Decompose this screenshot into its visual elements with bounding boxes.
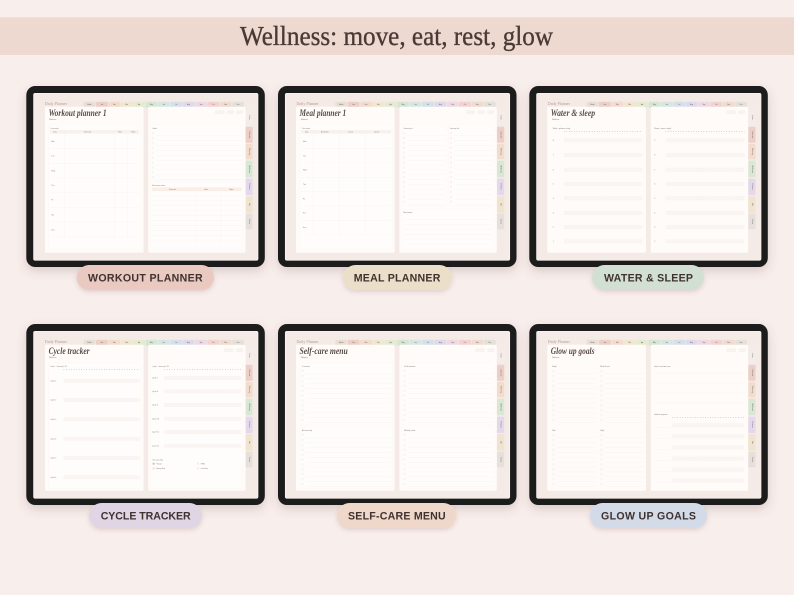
water tracker: 1 [553,241,554,243]
weekly workout table: Mon [51,141,55,143]
side tabs: Life [248,441,250,444]
heading: Workout planner 1 [49,108,107,119]
month tabs: Month [590,103,595,106]
goals: skin: Skin [552,430,556,432]
legend: Heavy flow [156,468,166,470]
goals: style: Style [600,429,604,432]
panel: self-care menu tablet [278,324,516,505]
legend: Use your key [152,459,163,461]
month tabs: Jan [352,104,355,106]
month tabs: Jun [163,342,165,344]
month tabs: Oct [212,103,215,106]
label: cycle tracker: CYCLE TRACKER [101,510,191,522]
left page [296,107,395,253]
side tabs: Index [751,115,753,120]
month tabs: Jul [175,342,178,344]
month tabs: Sep [200,104,203,106]
month tabs [335,102,496,108]
grocery list two: Grocery list [450,127,460,130]
panel: workout planner tablet: Wellness [49,119,56,121]
month tabs: Jan [101,104,103,106]
month tabs: Month [339,103,344,106]
weekly meal table: Fri [303,198,306,200]
side tabs [748,110,756,229]
meal notes: Meal notes [404,211,412,214]
side tabs: Planning [500,386,502,393]
side tabs: Wellness [248,165,250,173]
month tabs: Nov [224,104,227,106]
month tabs: Sep [703,342,706,344]
month tabs: Feb [365,342,367,344]
month tabs: Jan [352,342,355,344]
side tabs: Calendar [500,369,502,377]
left page [45,345,144,491]
sleep tracker: 2 [654,241,655,243]
goals checklist [151,125,242,180]
month tabs: Nov [727,342,730,344]
side tabs: Notes [500,219,502,224]
month tabs: Jul [427,342,430,344]
month tabs: Jun [666,342,668,344]
weekly meal table: Tue [303,155,306,157]
month tabs: Jan [604,342,606,344]
weekly workout table: Fri [51,200,54,202]
month tabs: Apr [390,341,393,344]
weekly meal table: Breakfast [321,130,329,134]
heading: Self-care menu [300,346,348,357]
side tabs: Index [500,353,502,358]
water tracker: 7 [553,155,554,157]
weekly meal table: Wed [303,170,307,172]
month tabs: Nov [727,104,730,106]
cycle chart right: Cycle 10 [152,418,159,420]
goals: mind and soul [600,366,644,423]
side tabs [748,348,756,467]
panel: glow up goals tablet: Daily Planner [548,339,571,344]
month tabs: Dec [740,104,743,106]
side tabs: Wellness [751,403,753,411]
sleep tracker: Sleep · hours a night [654,127,671,130]
month tabs: Dec [237,104,240,106]
water tracker: 6 [553,169,554,171]
panel: glow up goals tablet [529,324,768,505]
side tabs: Life [248,203,250,206]
label: cycle tracker [89,503,202,528]
legend: PMS [201,464,205,466]
label: self-care menu: SELF-CARE MENU [348,510,446,522]
month tabs [84,340,244,346]
side tabs: Finance [500,184,502,190]
side tabs: Index [751,353,753,358]
heading: Cycle tracker [49,346,90,357]
sleep tracker: 9 [654,140,655,142]
panel: water and sleep tablet [529,86,768,267]
side tabs [245,348,253,467]
weekly workout table: Sat [51,213,54,216]
panel: water and sleep tablet: Daily Planner [548,101,571,106]
panel: workout planner tablet: Daily Planner [45,101,68,106]
side tabs: Index [248,115,250,120]
month tabs: Feb [616,104,619,106]
exercise notes table [151,183,242,250]
checklist: at home [300,427,393,488]
side tabs: Wellness [751,165,753,173]
panel: workout planner tablet [26,86,265,267]
month tabs: Month [339,341,344,344]
month tabs: Apr [138,103,141,106]
checklist: 5 minutes: 5 minutes [302,365,310,368]
month tabs: Dec [740,342,743,344]
title banner [0,17,794,55]
right page [148,345,246,491]
month tabs: Feb [113,342,116,344]
month tabs: May [402,104,405,106]
weekly meal table: Dinner [374,132,380,134]
side tabs: Calendar [751,369,753,377]
month tabs: Dec [488,342,491,344]
side tabs: Notes [248,219,251,224]
month tabs: Jan [604,104,606,106]
right page [148,107,246,253]
panel: meal planner tablet: Daily Planner [296,101,319,106]
cycle chart right: Cycle 12 [152,445,159,447]
label: water and sleep: WATER & SLEEP [604,272,693,284]
water tracker: 3 [553,213,554,215]
exercise notes table: Exercise [169,189,176,191]
label: meal planner [343,265,452,290]
side tabs: Wellness [500,165,502,173]
month tabs: May [150,342,153,344]
water tracker [553,127,642,243]
month tabs: Apr [390,103,393,106]
weekly meal table: Day [305,132,308,134]
grocery list two [449,125,494,206]
cycle chart left: Cycle 2 [50,400,56,402]
month tabs: Jun [414,342,417,344]
cycle chart left: Cycle 1 [50,380,56,382]
goals: mind and soul: Mind & soul [600,366,610,368]
label: workout planner: WORKOUT PLANNER [88,272,203,284]
weekly workout table [49,125,140,250]
right page [400,107,497,253]
side tabs: Finance [751,422,753,428]
month tabs: Oct [464,103,467,106]
month tabs [587,102,747,108]
month tabs: Dec [488,104,491,106]
buttons [727,348,746,352]
side tabs: Life [500,441,502,444]
checklist: 15 to 30 minutes [402,363,494,425]
panel: meal planner tablet: Wellness [301,119,308,121]
weekly workout table: Sets [118,130,122,134]
legend [152,459,208,470]
goals: body [552,366,596,423]
side tabs: Planning [248,148,250,155]
side tabs: Calendar [248,131,250,139]
weekly workout table: Reps [131,132,136,134]
legend: Low flow [201,468,208,470]
cycle chart right [151,363,242,488]
month tabs: Mar [628,342,632,344]
month tabs: Oct [464,341,467,344]
panel: glow up goals tablet: Wellness [552,357,559,359]
panel: self-care menu tablet: Wellness [301,357,308,359]
label: glow up goals [590,503,707,528]
month tabs: Jul [678,104,681,106]
month tabs: Apr [641,103,644,106]
weekly meal table: Lunch [348,132,353,134]
sleep tracker [654,127,744,243]
cycle chart left: Cycle 4 [50,438,56,440]
sleep tracker: 6 [654,184,655,186]
weekly workout table: Wed [51,170,55,172]
cycle chart right: Cycle 8 [152,391,158,393]
month tabs: Jun [666,104,668,106]
sleep tracker: 3 [654,227,655,229]
water tracker: 5 [553,184,554,186]
weekly workout table: Day [53,132,57,134]
month tabs: Feb [113,104,116,106]
buttons [476,348,494,352]
side tabs: Notes [500,457,502,462]
cycle chart left: Cycle 3 [50,419,56,421]
exercise notes table: Exercises notes [152,184,165,187]
side tabs: Wellness [500,403,502,411]
weekly meal table: Your week [302,128,310,130]
month tabs: Month [590,341,595,344]
month tabs: Oct [212,341,215,344]
month tabs [84,102,244,108]
side tabs: Planning [500,148,502,155]
side tabs: Notes [751,219,754,224]
month tabs: Feb [616,342,619,344]
weekly workout table: Thu [51,185,54,187]
month tabs: Oct [715,103,718,106]
month tabs: Jan [101,342,103,344]
checklist: weekly rituals: Weekly rituals [404,429,415,432]
weekly meal table [300,125,392,250]
side tabs [245,110,253,229]
month tabs: Oct [715,341,718,344]
right page [651,345,748,491]
panel: meal planner tablet [278,86,516,267]
water tracker: 2 [553,227,554,229]
goals: style [600,429,644,487]
side tabs: Life [751,203,753,206]
side tabs: Calendar [248,369,250,377]
side tabs: Finance [248,422,250,428]
goals checklist: Goals [152,128,157,130]
month tabs: Mar [377,342,380,344]
side tabs: Planning [248,386,250,393]
month tabs: Aug [187,103,190,106]
buttons [224,348,243,352]
weekly workout table: Sun [51,229,55,231]
weekly workout table: Your week [50,128,59,130]
panel: self-care menu tablet: Daily Planner [296,339,319,344]
month tabs: May [653,104,656,106]
weekly meal table: Thu [303,184,306,186]
vision notes: How I see future me [654,365,670,368]
side tabs: Wellness [248,403,250,411]
side tabs: Planning [751,386,753,393]
water tracker: 4 [553,198,554,200]
month tabs: Dec [237,342,240,344]
buttons [215,110,243,114]
cycle chart left [49,363,140,488]
month tabs: Aug [439,341,442,344]
month tabs [335,340,496,346]
right page [651,107,748,253]
cycle chart left: Cycle 5 [50,458,56,460]
month tabs: Sep [451,104,454,106]
cycle chart left: Cycle 6 [50,477,56,479]
panel: cycle tracker tablet [26,324,265,505]
panel: cycle tracker tablet: Daily Planner [45,339,68,344]
left page [547,345,646,491]
side tabs: Life [751,441,753,444]
heading: Glow up goals [551,346,595,357]
side tabs: Notes [248,457,251,462]
side tabs [497,110,504,229]
checklist: 5 minutes [300,363,393,425]
sleep tracker: 7 [654,169,655,171]
heading: Meal planner 1 [299,108,346,119]
side tabs: Index [500,115,502,120]
month tabs: Apr [641,341,644,344]
sleep tracker: 5 [654,198,655,200]
side tabs: Planning [751,148,753,155]
cycle chart right: Cycle · January 1-31 [152,366,169,368]
month tabs: Jul [427,104,430,106]
grocery list one [402,125,446,206]
weekly workout table: Tue [51,156,54,158]
habit tracker [654,413,744,483]
grocery list one: Grocery list [404,127,413,130]
title: Wellness: move, eat, rest, glow [240,21,553,51]
label: workout planner [77,265,214,290]
month tabs: May [150,104,153,106]
month tabs: Mar [377,104,380,106]
label: glow up goals: GLOW UP GOALS [601,510,696,522]
side tabs: Finance [500,422,502,428]
label: self-care menu [337,503,456,528]
buttons [727,110,745,114]
month tabs: Aug [690,341,693,344]
month tabs: May [402,342,405,344]
left page [45,107,144,253]
month tabs: Sep [451,342,454,344]
month tabs: Nov [224,342,227,344]
water tracker: 8 [553,140,554,142]
side tabs: Index [248,353,250,358]
panel: water and sleep tablet: Wellness [552,119,559,121]
month tabs: Sep [703,104,706,106]
month tabs: Nov [476,104,479,106]
vision notes [654,365,745,403]
cycle chart right: Cycle 11 [152,432,159,434]
sleep tracker: 8 [654,155,655,157]
month tabs: May [653,342,656,344]
month tabs [587,340,747,346]
water tracker: Water · glasses a day [553,127,570,130]
left page [547,107,646,253]
month tabs: Apr [138,341,141,344]
month tabs: Mar [628,104,632,106]
month tabs: Mar [125,104,129,106]
weekly meal table: Sat [303,212,306,215]
month tabs: Jun [414,104,417,106]
side tabs: Finance [751,184,753,190]
checklist: 15 to 30 minutes: 15-30 minutes [404,365,415,368]
month tabs: Month [87,103,92,106]
month tabs: Nov [476,342,479,344]
label: water and sleep [592,265,704,290]
month tabs: Aug [439,103,442,106]
month tabs: Aug [187,341,190,344]
month tabs: Sep [200,342,203,344]
side tabs: Life [500,203,502,206]
side tabs: Notes [751,457,754,462]
goals: body: Body [552,366,556,368]
exercise notes table: Sets [204,188,208,191]
right page [400,345,497,491]
month tabs: Mar [125,342,129,344]
buttons [466,110,494,114]
habit tracker: Habit to improve [654,413,667,416]
sleep tracker: 4 [654,213,655,215]
weekly workout table: Exercise [84,132,91,134]
cycle chart left: Cycle · January 1-31 [50,366,67,368]
weekly meal table: Mon [303,141,306,143]
legend: Period [156,464,162,466]
exercise notes table: Reps [229,189,234,191]
meal notes [402,209,494,250]
label: meal planner: MEAL PLANNER [354,272,441,284]
month tabs: Month [87,341,92,344]
month tabs: Feb [365,104,367,106]
side tabs: Finance [248,184,250,190]
weekly meal table: Sun [303,227,306,229]
heading: Water & sleep [551,108,595,119]
goals: skin [552,430,596,487]
month tabs: Jul [175,104,178,106]
side tabs: Calendar [751,131,753,139]
month tabs: Jun [163,104,165,106]
cycle chart right: Cycle 7 [152,378,158,380]
month tabs: Jul [678,342,681,344]
side tabs [497,348,504,467]
left page [296,345,395,491]
side tabs: Calendar [500,131,502,139]
month tabs: Aug [690,103,693,106]
checklist: at home: At home day [302,429,312,432]
panel: cycle tracker tablet: Wellness [49,357,56,359]
cycle chart right: Cycle 9 [152,405,158,407]
checklist: weekly rituals [402,427,494,488]
